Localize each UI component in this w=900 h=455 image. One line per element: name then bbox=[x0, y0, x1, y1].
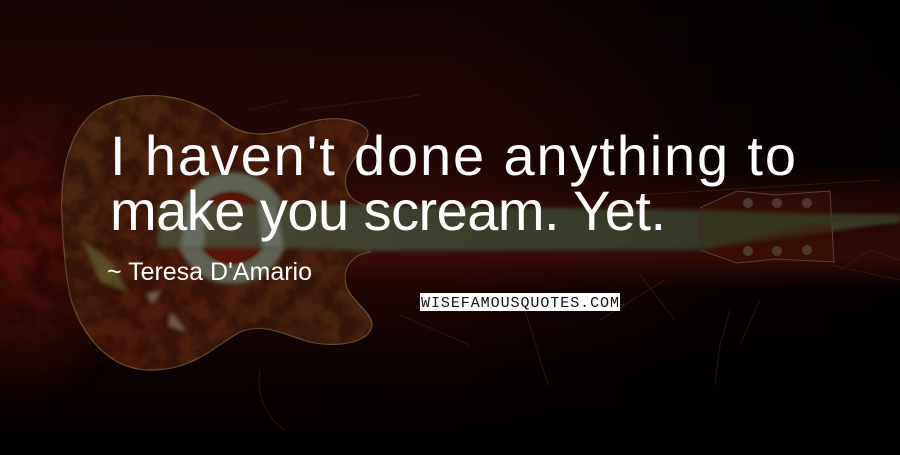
quote line 1: I haven't done anything to bbox=[110, 124, 796, 187]
guitar neck bbox=[158, 204, 900, 251]
bright neck ring overlay bbox=[180, 204, 284, 248]
guitar illustration bbox=[61, 95, 900, 400]
author: ~ Teresa D'Amario bbox=[107, 258, 312, 286]
body texture bbox=[62, 96, 372, 370]
quote text bbox=[107, 124, 796, 286]
body highlights bbox=[82, 240, 186, 332]
sparks bbox=[250, 95, 900, 430]
guitar body bbox=[62, 96, 372, 370]
right fire band behind guitar head bbox=[340, 165, 900, 290]
tuning pegs bbox=[743, 198, 812, 256]
sound hole ring bbox=[186, 182, 278, 274]
quote line 2: make you scream. Yet. bbox=[110, 179, 666, 242]
logo: wisefamousquotes: WISEFAMOUSQUOTES.COM bbox=[421, 295, 619, 312]
guitar neck over head bbox=[700, 211, 900, 249]
background bbox=[0, 0, 681, 396]
guitar head bbox=[700, 191, 834, 263]
